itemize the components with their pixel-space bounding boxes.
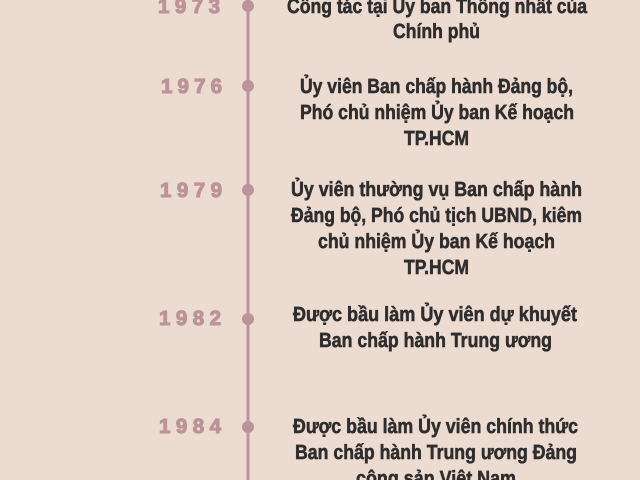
description 1982 [293, 302, 577, 352]
description 1979 [291, 177, 582, 279]
description 1982: Được bầu làm Ủy viên dự khuyết [293, 302, 577, 326]
description 1979: TP.HCM [404, 256, 469, 279]
marker 1979 [242, 184, 254, 196]
entry: 1979 [160, 177, 582, 279]
year 1982: 1982 [159, 307, 221, 330]
timeline axis [246, 0, 250, 480]
description 1976: Phó chủ nhiệm Ủy ban Kế hoạch [300, 100, 574, 124]
description 1976 [300, 74, 574, 150]
description 1984 [293, 414, 578, 480]
year 1984: 1984 [159, 415, 222, 438]
description 1984: Được bầu làm Ủy viên chính thức [293, 414, 578, 438]
entry: 1973 [158, 0, 588, 43]
description 1973 [287, 0, 588, 43]
description 1973: Chính phủ [393, 20, 480, 43]
description 1982: Ban chấp hành Trung ương [319, 329, 552, 352]
marker 1973 [242, 0, 254, 12]
marker 1976 [242, 80, 254, 92]
description 1979: Đảng bộ, Phó chủ tịch UBND, kiêm [291, 204, 582, 227]
year 1979: 1979 [160, 179, 222, 202]
marker 1984 [242, 421, 254, 433]
description 1979: Ủy viên thường vụ Ban chấp hành [291, 177, 582, 201]
description 1979: chủ nhiệm Ủy ban Kế hoạch [318, 229, 555, 253]
year 1976: 1976 [161, 75, 222, 98]
description 1976: TP.HCM [404, 127, 469, 150]
entry: 1984 [159, 414, 578, 480]
marker 1982 [242, 313, 254, 325]
entry: 1976 [161, 74, 574, 150]
description 1976: Ủy viên Ban chấp hành Đảng bộ, [300, 74, 573, 98]
description 1984: Ban chấp hành Trung ương Đảng [295, 441, 577, 464]
entry: 1982 [159, 302, 577, 352]
